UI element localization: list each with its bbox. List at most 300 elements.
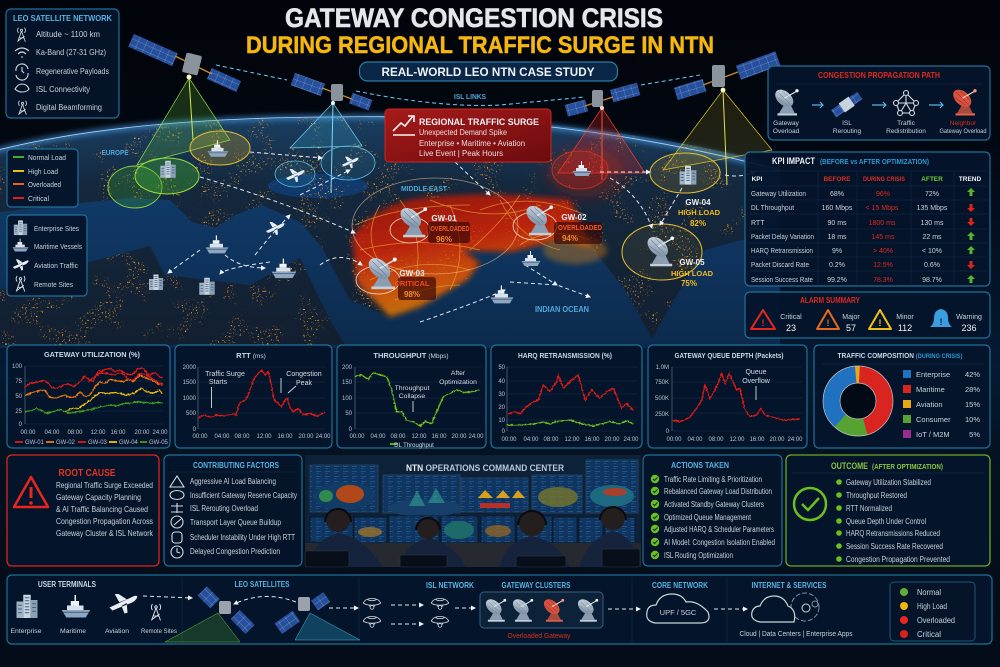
gateway cluster [480, 592, 603, 640]
chart: gateway utilization [7, 345, 170, 448]
chairs [305, 549, 640, 567]
chart: throughput: 150 [342, 380, 353, 386]
user terminal icons: Enterprise [11, 628, 42, 635]
subtitle pill: REAL-WORLD LEO NTN CASE STUDY [382, 65, 594, 79]
gateway GW-01 [390, 204, 470, 244]
utilization legend [15, 440, 169, 446]
chart: gateway utilization: 16:00 [110, 430, 126, 436]
chart: gateway utilization: 25 [15, 409, 23, 415]
satellite 1 [128, 34, 241, 92]
panel: LEO satellite network: ISL Connectivity [36, 85, 90, 94]
panel: LEO satellite network: LEO SATELLITE NETWORK [13, 13, 113, 23]
panel: root cause: Gateway Capacity Planning [56, 492, 141, 502]
KPI rows: Gateway Utilization [751, 191, 806, 198]
panel: contributing factors: Delayed Congestion Prediction [190, 547, 280, 556]
RTT annotations: Congestion [286, 371, 322, 378]
chart: gateway utilization: 12:00 [90, 430, 106, 436]
KPI rows [751, 191, 948, 284]
panel: regional traffic surge: Unexpected Demand Spike [419, 128, 507, 137]
monitor map details [313, 482, 634, 517]
panel: actions taken: AI Model: Congestion Isolation Enabled [664, 538, 775, 547]
chart: gateway utilization: 50 [15, 394, 23, 400]
KPI rows: 90 ms [827, 220, 847, 227]
user terminal icons: Remote Sites [141, 628, 178, 635]
panel: regional traffic surge: REGIONAL TRAFFIC SURGE [419, 117, 539, 128]
status legend: Overloaded [917, 616, 955, 625]
KPI rows: Session Success Rate [751, 277, 813, 284]
desk [305, 543, 641, 567]
chart: HARQ retransmission: HARQ RETRANSMISSION (%) [518, 351, 612, 360]
throughput annotations: Collapse [399, 393, 425, 400]
chart: HARQ retransmission: 30 [498, 392, 506, 398]
panel: site types: Maritime Vessels [34, 242, 82, 251]
section headings: INTERNET & SERVICES [752, 581, 826, 590]
donut legend: Aviation [916, 400, 943, 409]
lower monitor maps [358, 521, 511, 539]
panel: alarm summary: ALARM SUMMARY [800, 296, 861, 305]
chart: HARQ retransmission: 20 [498, 405, 506, 411]
chart: HARQ retransmission: 0 [502, 429, 506, 435]
chart: gateway queue depth [648, 345, 807, 448]
chart: gateway queue depth: 1.0M [656, 365, 669, 371]
chart: RTT: 08:00 [234, 434, 250, 440]
chart: gateway queue depth: 250K [655, 412, 669, 418]
chart: HARQ retransmission [491, 345, 642, 448]
chart: HARQ retransmission: 20:00 [604, 437, 620, 443]
panel: outcome: Gateway Utilization Stabilized [846, 478, 931, 487]
KPI rows: 135 Mbps [917, 205, 948, 212]
KPI rows: < 10% [922, 248, 942, 255]
panel: LEO satellite network: Altitude ~ 1100 km [36, 30, 100, 39]
KPI header row [752, 176, 981, 183]
large hot ring [352, 178, 518, 274]
satellite beam: yellow [622, 90, 772, 280]
chart: gateway utilization: 24:00 [152, 430, 168, 436]
gateway GW-05: GW-05 [679, 258, 705, 267]
chart: gateway utilization: 75 [15, 379, 23, 385]
gateway GW-04 [678, 198, 721, 228]
chart: RTT: 00:00 [192, 434, 208, 440]
traffic routes [168, 152, 755, 322]
status legend: Critical [917, 630, 941, 639]
panel: site types: Enterprise Sites [34, 224, 79, 233]
KPI rows: 9% [832, 248, 842, 255]
utilization legend: GW-05 [149, 440, 169, 446]
panel: alarm summary [745, 292, 990, 338]
donut legend: 15% [965, 400, 980, 409]
queue overflow annotation [742, 369, 771, 400]
chart: RTT: 2000 [183, 365, 197, 371]
chart: RTT: 0 [193, 427, 197, 433]
panel: actions taken: Activated Standby Gateway Clusters [664, 500, 764, 509]
queue overflow annotation: Overflow [742, 378, 771, 385]
chart: gateway queue depth: 04:00 [687, 437, 703, 443]
panel: alarm summary: Minor [896, 314, 914, 321]
gateway cluster: Overloaded Gateway [508, 631, 571, 640]
KPI rows: DL Throughput [751, 205, 794, 212]
panel: LEO satellite network: Digital Beamforming [36, 103, 102, 112]
chart: RTT: 16:00 [277, 434, 293, 440]
KPI header row: TREND [959, 176, 981, 183]
chart: RTT: 20:00 [298, 434, 314, 440]
gateway GW-05 [644, 233, 714, 288]
subtitle pill [360, 62, 618, 81]
chart: HARQ retransmission: 04:00 [523, 437, 539, 443]
KPI rows: Packet Delay Variation [751, 234, 814, 241]
KPI rows: 145 ms [872, 234, 895, 241]
KPI rows: 0.2% [829, 262, 845, 269]
panel: end-to-end architecture strip [7, 575, 992, 644]
chart: gateway utilization: 04:00 [44, 430, 60, 436]
chart: RTT: 1000 [183, 396, 197, 402]
panel: congestion propagation path: Overload [773, 128, 800, 135]
KPI rows: 18 ms [827, 234, 847, 241]
title [246, 3, 714, 59]
map region labels: INDIAN OCEAN [535, 305, 589, 314]
gateway GW-01: OVERLOADED [430, 224, 470, 233]
chart: throughput: THROUGHPUT (Mbps) [373, 351, 449, 360]
panel: alarm summary: 236 [961, 323, 977, 333]
KPI rows: 72% [925, 191, 939, 198]
gateway GW-05: 75% [681, 279, 697, 288]
donut legend: 42% [965, 370, 980, 379]
chart: RTT: RTT (ms) [236, 351, 266, 360]
panel: LEO satellite network: Ka-Band (27-31 GHz) [36, 48, 106, 57]
chart: traffic composition donut [814, 345, 990, 448]
KPI rows: 1800 ms [869, 220, 896, 227]
panel: contributing factors [164, 455, 302, 566]
status legend: Normal [917, 588, 941, 597]
chart: RTT: 12:00 [256, 434, 272, 440]
KPI rows: 98.7% [922, 277, 942, 284]
throughput annotations: Throughput [395, 385, 429, 392]
gateway GW-05: HIGH LOAD [671, 269, 714, 278]
chart: throughput: 04:00 [370, 434, 386, 440]
chart: RTT: 24:00 [315, 434, 331, 440]
panel: congestion propagation path: Rerouting [833, 128, 861, 135]
KPI rows: HARQ Retransmission [751, 248, 813, 255]
panel: congestion propagation path: CONGESTION PROPAGATION PATH [818, 70, 940, 80]
chart: HARQ retransmission: 50 [498, 365, 506, 371]
panel: outcome: (AFTER OPTIMIZATION) [872, 464, 943, 471]
gateway GW-04: GW-04 [685, 198, 711, 207]
utilization legend: GW-03 [88, 440, 108, 446]
panel: congestion propagation path: Traffic [897, 120, 916, 127]
panel: contributing factors: Aggressive AI Load Balancing [190, 477, 276, 486]
panel: actions taken: ACTIONS TAKEN [671, 461, 729, 470]
KPI rows: < 15 Mbps [866, 205, 899, 212]
RTT annotations: Starts [209, 379, 228, 386]
core network cloud: UPF / 5GC [660, 608, 697, 617]
utilization legend: GW-04 [119, 440, 139, 446]
chart: throughput: 50 [345, 411, 353, 417]
panel: NTN operations command center [305, 455, 641, 567]
chart: throughput: 200 [342, 365, 353, 371]
utilization legend: GW-01 [25, 440, 45, 446]
chart: HARQ retransmission: 00:00 [501, 437, 517, 443]
satellite beam: blue [275, 103, 375, 193]
map region labels: EUROPE [102, 150, 129, 157]
section headings [38, 580, 826, 590]
panel: LEO satellite network: Regenerative Payloads [36, 67, 109, 76]
chart: gateway utilization: 08:00 [67, 430, 83, 436]
panel: alarm summary: ! [878, 318, 882, 328]
strip satellites [165, 586, 360, 642]
chart: throughput: 100 [342, 396, 353, 402]
KPI rows: 96% [876, 191, 890, 198]
KPI rows: 68% [830, 191, 844, 198]
panel: outcome: Throughput Restored [846, 491, 907, 500]
panel: actions taken: Rebalanced Gateway Load Distribution [664, 487, 772, 496]
satellite 4 [674, 51, 780, 100]
chart: gateway queue depth: 12:00 [729, 437, 745, 443]
gateway GW-02: GW-02 [561, 213, 587, 222]
donut legend: 5% [969, 430, 980, 439]
internet services cloud [740, 593, 853, 638]
icon: outcome check [794, 488, 826, 520]
chart: gateway queue depth: 0 [666, 429, 670, 435]
panel: contributing factors: CONTRIBUTING FACTORS [193, 461, 280, 470]
KPI rows: > 40% [873, 248, 893, 255]
chart: throughput: 0 [349, 427, 353, 433]
gateway GW-04: 82% [690, 219, 706, 228]
panel: load legend: Critical [28, 194, 49, 203]
chart: gateway utilization: GATEWAY UTILIZATION (%) [44, 350, 140, 359]
donut legend: Consumer [916, 415, 951, 424]
throughput annotations: Optimization [439, 379, 477, 386]
panel: regional traffic surge [385, 109, 551, 162]
panel: site types: Aviation Traffic [34, 261, 78, 270]
panel: contributing factors: Transport Layer Queue Buildup [190, 518, 282, 527]
user terminal icons: Aviation [105, 628, 129, 635]
donut legend: Enterprise [916, 370, 950, 379]
earth map [0, 100, 780, 350]
panel: actions taken: Optimized Queue Management [664, 513, 752, 522]
section headings: USER TERMINALS [38, 580, 96, 589]
KPI rows: 22 ms [922, 234, 942, 241]
satellite 2 [291, 73, 372, 110]
panel: actions taken [643, 455, 782, 566]
panel: alarm summary: 112 [898, 323, 912, 333]
gateway GW-03 [356, 254, 436, 300]
chart: gateway utilization: 0 [19, 422, 23, 428]
RTT annotations [205, 371, 322, 408]
user terminal icons [11, 594, 178, 635]
panel: congestion propagation path: ISL [842, 120, 852, 127]
panel: regional traffic surge: Enterprise • Maritime • Aviation [419, 139, 525, 148]
gateway GW-03: CRITICAL [394, 279, 430, 288]
chart: gateway queue depth: GATEWAY QUEUE DEPTH (Packets) [674, 351, 784, 360]
RTT annotations: Traffic Surge [205, 371, 245, 378]
panel: root cause: ROOT CAUSE [58, 467, 116, 479]
KPI rows: 130 ms [921, 220, 944, 227]
ISL network nodes [363, 599, 475, 627]
KPI header row: BEFORE [823, 176, 851, 183]
panel: outcome: Congestion Propagation Prevented [846, 555, 950, 564]
chart: throughput: 00:00 [349, 434, 365, 440]
KPI rows: RTT [751, 220, 765, 227]
chart: gateway utilization: 20:00 [134, 430, 150, 436]
panel: root cause: & AI Traffic Balancing Caused [56, 504, 148, 514]
donut legend: 10% [965, 415, 980, 424]
section headings: ISL NETWORK [426, 581, 474, 590]
panel: congestion propagation path [768, 66, 990, 140]
panel: alarm summary: ! [826, 318, 830, 328]
lower monitors [310, 516, 635, 543]
utilization legend: GW-02 [56, 440, 76, 446]
KPI rows: 99.2% [827, 277, 847, 284]
panel: outcome [786, 455, 990, 566]
chart: HARQ retransmission: 08:00 [543, 437, 559, 443]
KPI header row: KPI [752, 176, 763, 183]
satellite beam: green [108, 78, 250, 208]
internet services cloud: Cloud | Data Centers | Enterprise Apps [740, 631, 853, 638]
operators [310, 506, 641, 567]
chart: throughput: 24:00 [468, 434, 484, 440]
section headings: GATEWAY CLUSTERS [502, 581, 570, 590]
map site icons [149, 140, 696, 303]
chart: gateway utilization: 00:00 [20, 430, 36, 436]
panel: alarm summary: Warning [956, 314, 982, 321]
status legend: High Load [917, 602, 947, 611]
panel: actions taken: Traffic Rate Limiting & Prioritization [664, 475, 762, 484]
icon: warning triangle [14, 477, 48, 507]
chart: HARQ retransmission: 12:00 [564, 437, 580, 443]
panel: regional traffic surge: Live Event | Peak Hours [419, 149, 503, 158]
chart: gateway queue depth: 16:00 [749, 437, 765, 443]
panel: congestion propagation path: Gateway [773, 120, 800, 127]
section headings: LEO SATELLITES [234, 580, 290, 589]
gateway GW-03: 98% [404, 290, 420, 299]
donut legend: Maritime [916, 385, 945, 394]
satellite beam: red [552, 108, 645, 189]
panel: load legend [7, 149, 78, 207]
throughput annotations [390, 370, 477, 449]
chart: throughput: 12:00 [411, 434, 427, 440]
panel: load legend: Overloaded [28, 180, 61, 189]
map region labels [102, 94, 589, 314]
panel: site types [7, 215, 87, 296]
chart: gateway queue depth: 00:00 [666, 437, 682, 443]
trend arrows [967, 188, 975, 283]
panel: actions taken: ISL Routing Optimization [664, 551, 733, 560]
panel: congestion propagation path: Neighbor [950, 120, 977, 127]
status legend [890, 582, 975, 641]
panel: alarm summary: ! [940, 317, 942, 327]
upper monitors [310, 460, 638, 513]
KPI header row: AFTER [921, 176, 943, 183]
panel: congestion propagation path: Redistribution [886, 128, 926, 135]
panel: root cause: Regional Traffic Surge Exceeded [56, 480, 153, 490]
panel: root cause [7, 455, 159, 566]
gateway GW-04: HIGH LOAD [678, 208, 721, 217]
panel: outcome: HARQ Retransmissions Reduced [846, 529, 940, 538]
core network cloud [647, 594, 709, 623]
panel: congestion propagation path: Gateway Overload [940, 128, 987, 135]
chart: RTT: 04:00 [214, 434, 230, 440]
panel: load legend: Normal Load [28, 153, 66, 162]
panel: load legend: High Load [28, 167, 58, 176]
user terminal icons: Maritime [60, 628, 86, 635]
title: DURING REGIONAL TRAFFIC SURGE IN NTN [246, 32, 714, 59]
chart: HARQ retransmission: 10 [498, 418, 506, 424]
section headings: CORE NETWORK [652, 581, 708, 590]
panel: alarm summary: Critical [780, 314, 802, 321]
KPI rows: 12.5% [873, 262, 893, 269]
KPI rows: Packet Discard Rate [751, 262, 809, 269]
map region labels: ISL LINKS [454, 94, 486, 101]
RTT annotations: Peak [296, 380, 312, 387]
panel: site types: Remote Sites [34, 280, 73, 289]
panel: contributing factors: Scheduler Instability Under High RTT [190, 533, 295, 542]
throughput annotations: DL Throughput [394, 443, 434, 449]
gateway GW-03: GW-03 [399, 269, 425, 278]
panel: alarm summary: ! [762, 318, 764, 328]
panel: KPI impact table: KPI IMPACT [772, 156, 815, 166]
gateway GW-01: 96% [436, 235, 452, 244]
panel: NTN operations command center: NTN OPERATIONS COMMAND CENTER [406, 463, 564, 474]
queue overflow annotation: Queue [745, 369, 767, 376]
chart: HARQ retransmission: 40 [498, 379, 506, 385]
chart: gateway queue depth: 08:00 [708, 437, 724, 443]
panel: outcome: Session Success Rate Recovered [846, 542, 943, 551]
chart: throughput: 08:00 [390, 434, 406, 440]
chart: throughput: 20:00 [451, 434, 467, 440]
gateway GW-02: 94% [562, 234, 578, 243]
chart: RTT [175, 345, 332, 448]
donut legend: IoT / M2M [916, 430, 950, 439]
panel: root cause: Gateway Cluster & ISL Network [56, 528, 154, 538]
gateway GW-02: OVERLOADED [558, 223, 602, 232]
panel: contributing factors: Insufficient Gateway Reserve Capacity [190, 491, 297, 500]
chart: throughput: 16:00 [431, 434, 447, 440]
map region labels: MIDDLE EAST [401, 186, 448, 193]
panel: alarm summary: 23 [786, 323, 796, 333]
chart: gateway utilization: 100 [12, 364, 23, 370]
chart: gateway queue depth: 24:00 [787, 437, 803, 443]
chart: traffic composition donut: TRAFFIC COMPOSITION (DURING CRISIS) [838, 351, 962, 360]
chart: RTT: 500 [186, 411, 197, 417]
KPI rows: 160 Mbps [822, 205, 853, 212]
panel: alarm summary: Major [842, 314, 860, 321]
panel: root cause: Congestion Propagation Across [56, 516, 153, 526]
chart: gateway queue depth: 500K [655, 396, 669, 402]
chart: HARQ retransmission: 16:00 [584, 437, 600, 443]
chart: gateway queue depth: 20:00 [769, 437, 785, 443]
chart: throughput [337, 345, 486, 449]
chart: RTT: 1500 [183, 380, 197, 386]
hot congestion region [0, 116, 744, 345]
panel: LEO satellite network [6, 9, 119, 118]
panel: alarm summary: 57 [846, 323, 856, 333]
panel: contributing factors: ISL Rerouting Overload [190, 504, 258, 513]
panel: KPI impact table: (BEFORE vs AFTER OPTIMIZATION) [820, 159, 929, 166]
donut legend: 28% [965, 385, 980, 394]
donut legend [903, 370, 980, 439]
KPI header row: DURING CRISIS [863, 176, 906, 183]
gateway GW-02 [513, 202, 602, 244]
gateway GW-01: GW-01 [431, 214, 457, 223]
throughput annotations: After [451, 370, 466, 377]
ISL dashed links [216, 65, 700, 105]
check icons [651, 475, 659, 559]
panel: outcome: Queue Depth Under Control [846, 517, 926, 526]
satellite 3 [565, 83, 640, 117]
title: GATEWAY CONGESTION CRISIS [285, 3, 663, 33]
chart: gateway queue depth: 750K [655, 380, 669, 386]
chart: HARQ retransmission: 24:00 [623, 437, 639, 443]
panel: KPI impact table [745, 152, 990, 286]
